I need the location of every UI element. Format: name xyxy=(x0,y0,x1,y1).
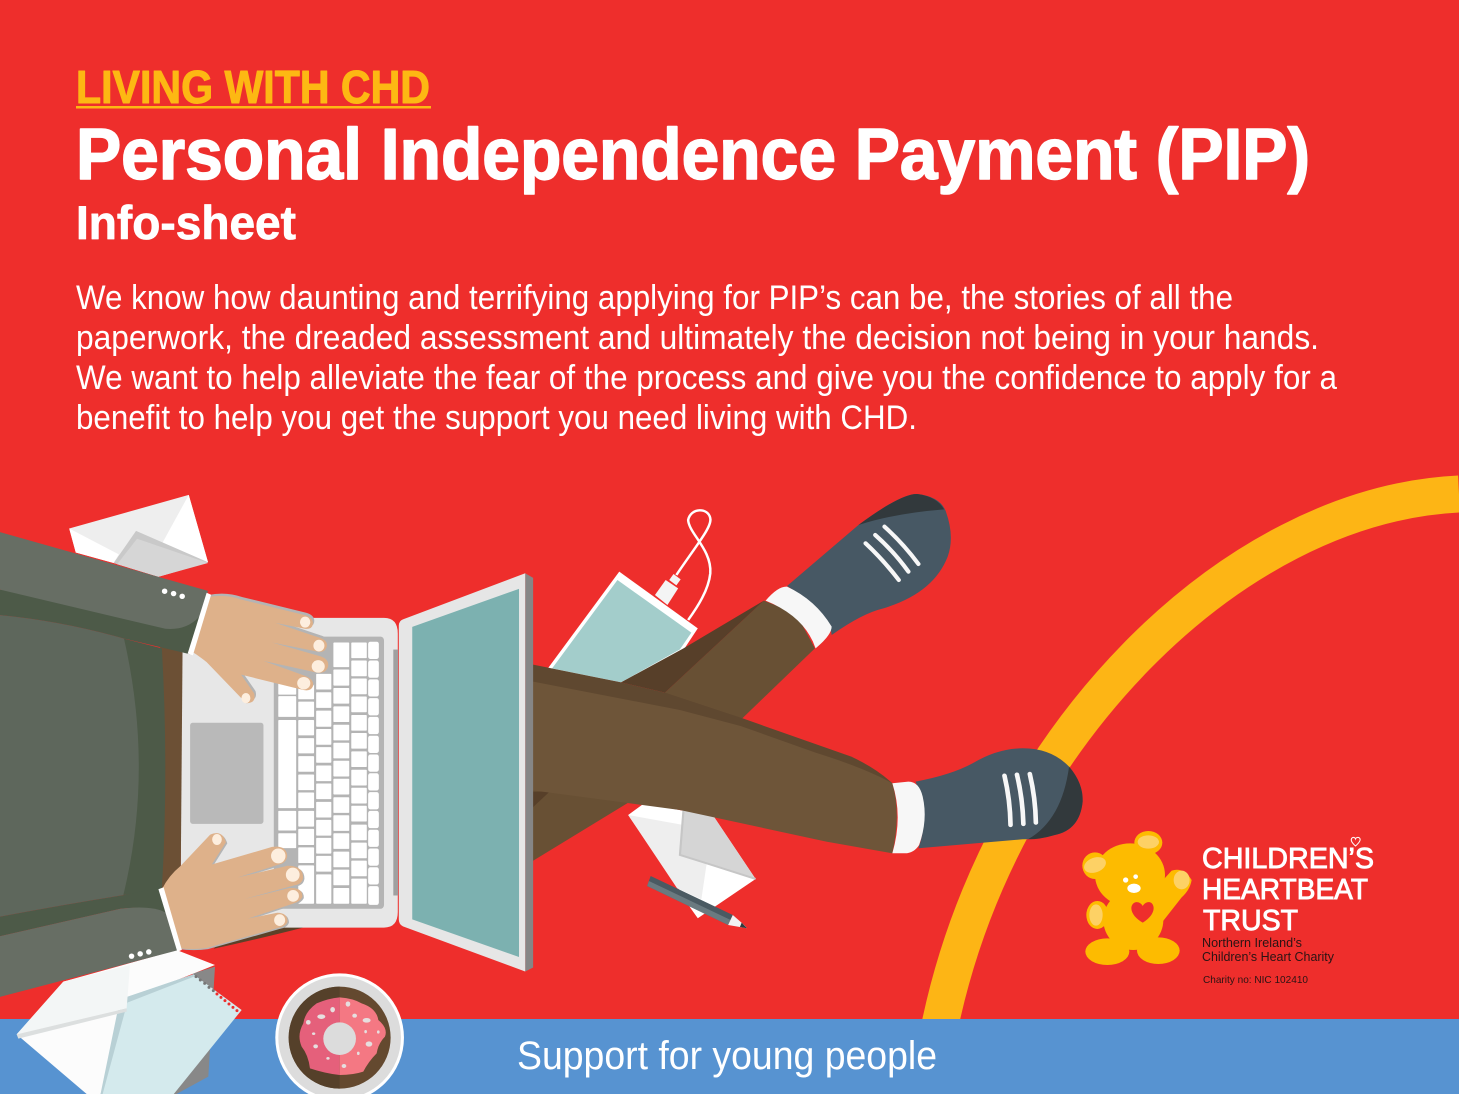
upper hand xyxy=(188,593,330,703)
yellow arc xyxy=(940,494,1459,1025)
back sock xyxy=(766,494,951,648)
lower hand xyxy=(158,833,304,952)
title: Personal Independence Payment (PIP) xyxy=(76,115,1310,195)
logo tagline xyxy=(1202,936,1335,986)
icon: yellow teddy bear xyxy=(1082,831,1192,965)
tablet with cable xyxy=(548,510,710,682)
laptop base xyxy=(181,618,398,949)
shirt and belly xyxy=(123,639,183,895)
illustration: legs, tablet and envelope xyxy=(530,494,1083,928)
lower sleeve xyxy=(0,887,179,997)
envelope top left xyxy=(69,495,208,577)
logo wordmark: TRUST xyxy=(1203,905,1298,937)
subtitle: Info-sheet xyxy=(76,196,296,249)
kicker heading: LIVING WITH CHD xyxy=(76,61,430,113)
logo tagline: Charity no: NIC 102410 xyxy=(1203,974,1308,986)
logo wordmark xyxy=(1202,843,1374,937)
front leg xyxy=(530,664,897,853)
upper arm sleeve xyxy=(0,532,208,654)
keyboard xyxy=(274,637,384,909)
pencil xyxy=(647,876,747,928)
laptop lid and screen xyxy=(399,573,533,971)
notepad perforations xyxy=(194,975,238,1012)
footer band xyxy=(0,1019,1459,1094)
logo wordmark: HEARTBEAT xyxy=(1202,874,1368,906)
icon: donut on a plate xyxy=(275,973,404,1094)
logo tagline: Children’s Heart Charity xyxy=(1202,950,1335,964)
front sock xyxy=(892,748,1083,853)
jacket body xyxy=(0,615,139,917)
logo tagline: Northern Ireland’s xyxy=(1202,936,1302,950)
intro paragraph: We know how daunting and terrifying applying for PIP’s can be, the stories of all the xyxy=(76,279,1233,317)
intro paragraph xyxy=(76,279,1337,437)
intro paragraph: benefit to help you get the support you need living with CHD. xyxy=(76,399,917,437)
trackpad xyxy=(190,723,263,824)
back leg xyxy=(530,601,815,863)
footer band: Support for young people xyxy=(517,1034,937,1078)
logo: Children's Heartbeat Trust xyxy=(1082,831,1374,986)
illustration: person at laptop xyxy=(0,495,533,997)
logo wordmark: CHILDREN’S xyxy=(1202,843,1374,875)
envelope under legs xyxy=(628,803,756,918)
icon: small heart above logo xyxy=(1351,837,1360,846)
intro paragraph: We want to help alleviate the fear of the process and give you the confidence to apply for a xyxy=(76,359,1337,397)
intro paragraph: paperwork, the dreaded assessment and ultimately the decision not being in your hands. xyxy=(76,319,1319,357)
illustration: paper envelope at bottom left xyxy=(17,950,242,1094)
